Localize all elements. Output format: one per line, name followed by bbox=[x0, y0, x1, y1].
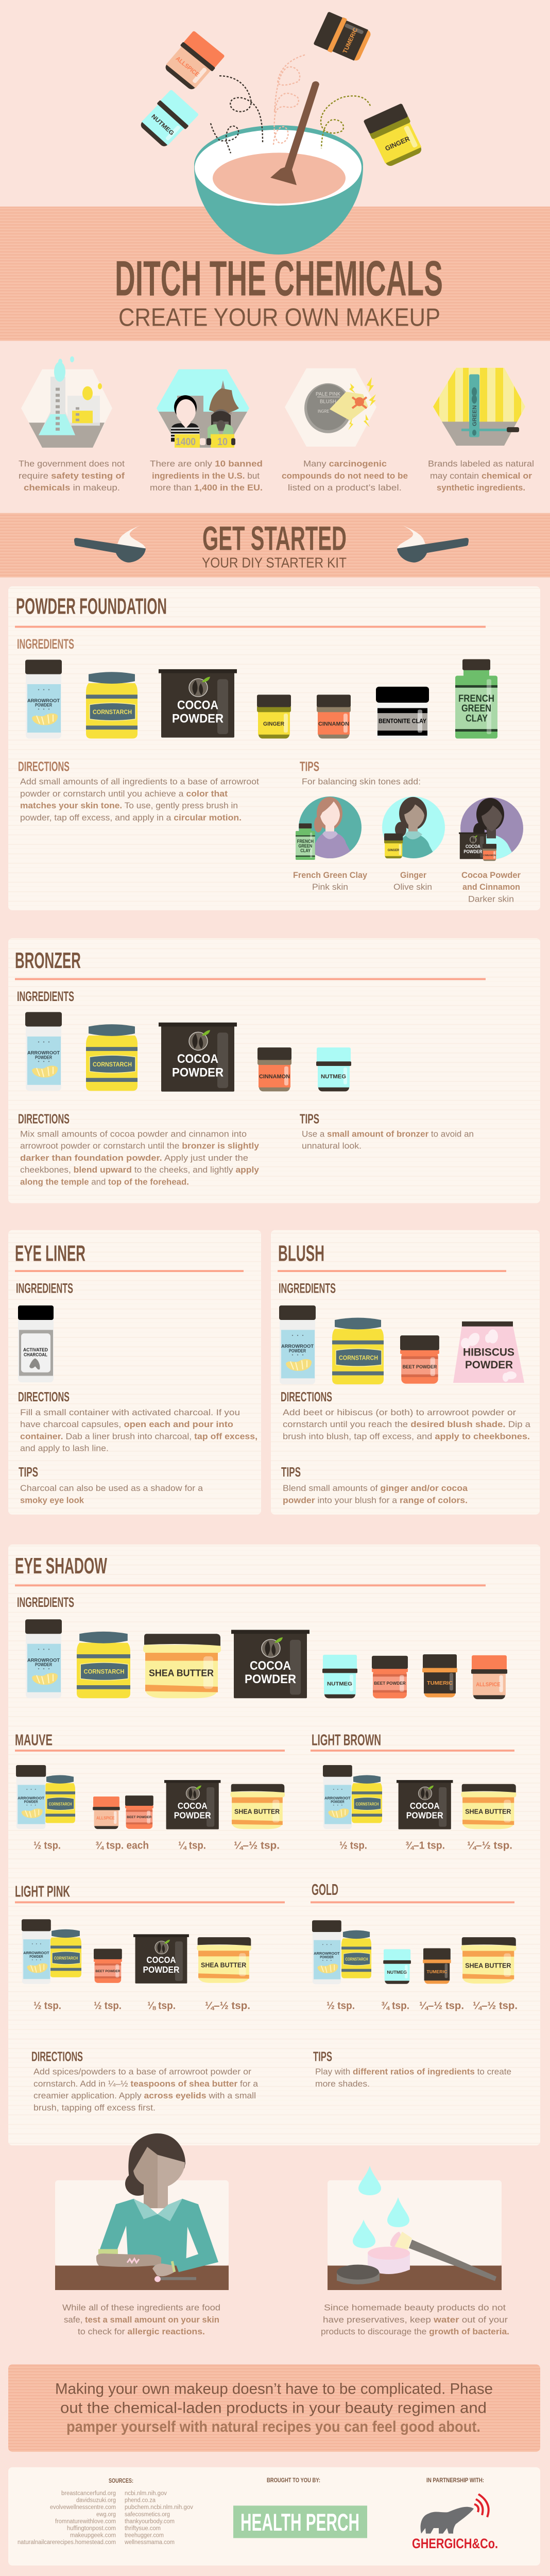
jar: cocoa powder: COCOA bbox=[410, 1801, 440, 1811]
jar: tumeric bbox=[422, 1654, 457, 1697]
jar: arrowroot powder bbox=[16, 1765, 46, 1829]
jar: arrowroot powder: ARROWROOT bbox=[27, 1658, 60, 1663]
measures: light pink bbox=[33, 2000, 250, 2012]
dashed swirl trails bbox=[211, 55, 370, 153]
tips text: more shades. bbox=[315, 2079, 370, 2089]
heading: in partnership with: IN PARTNERSHIP WITH: bbox=[426, 2477, 484, 2484]
text block: keep water out: Since homemade beauty products do not bbox=[324, 2303, 506, 2313]
jar: cocoa powder: COCOA bbox=[177, 1052, 218, 1066]
jar: arrowroot powder bbox=[323, 1765, 352, 1829]
measures: light pink: ½ tsp. bbox=[94, 2000, 122, 2012]
jar: arrowroot powder bbox=[279, 1306, 316, 1384]
jar: cocoa powder bbox=[397, 1780, 453, 1829]
jar: cornstarch: CORNSTARCH bbox=[339, 1354, 378, 1361]
jar: shea butter: SHEA BUTTER bbox=[201, 1961, 247, 1969]
jar: cornstarch bbox=[50, 1929, 81, 1977]
labels: skin tone recommendations: Pink skin bbox=[312, 882, 348, 892]
jar: allspice bbox=[471, 1655, 507, 1699]
jar: cornstarch bbox=[77, 1632, 130, 1698]
jar: arrowroot powder: POWDER bbox=[320, 1955, 334, 1959]
text block: banned ingredients line 2: ingredients in the U.S. but bbox=[152, 471, 260, 481]
labels: skin tone recommendations: Olive skin bbox=[393, 882, 432, 892]
jar: cocoa powder: POWDER bbox=[143, 1964, 180, 1975]
jar: cinnamon bbox=[317, 694, 351, 739]
text block: safety testing line 2: require safety testing of bbox=[19, 471, 125, 481]
callout: closing statement bbox=[8, 2364, 540, 2452]
subheading: ingredients: INGREDIENTS bbox=[16, 1280, 73, 1296]
panel: eye shadow bbox=[8, 1545, 540, 2145]
directions text bbox=[33, 2067, 259, 2112]
labels: skin tone recommendations: and Cinnamon bbox=[462, 882, 520, 892]
measures: light pink: ⅛ tsp. bbox=[147, 2000, 176, 2012]
jar: allspice bbox=[162, 30, 226, 93]
directions text: cornstarch until you reach the desired blush shade. Dip a bbox=[283, 1419, 531, 1429]
jar: cornstarch: CORNSTARCH bbox=[93, 1061, 132, 1068]
jar: arrowroot powder: POWDER bbox=[35, 1662, 52, 1667]
text block: keep water out: have preservatives, keep water out of your bbox=[323, 2315, 508, 2325]
jar: shea butter: SHEA BUTTER bbox=[149, 1668, 214, 1679]
directions text: cornstarch. Add in ¼–½ teaspoons of shea butter for a bbox=[33, 2079, 259, 2089]
subheading: tips: TIPS bbox=[300, 1111, 319, 1126]
directions text bbox=[20, 777, 259, 822]
icon: blush compact under magnifying light bbox=[285, 368, 376, 447]
list: sources: phend.co.za bbox=[125, 2497, 156, 2504]
text block: keep water out bbox=[321, 2303, 509, 2336]
figure: pink skin with french green clay bbox=[296, 796, 362, 861]
recipe: gold bbox=[311, 1880, 518, 2012]
jar: beet powder bbox=[94, 1948, 122, 1983]
list: sources: treehugger.com bbox=[125, 2532, 164, 2538]
labels: skin tone recommendations: Cocoa Powder bbox=[461, 870, 521, 880]
directions text: Add small amounts of all ingredients to a base of arrowroot bbox=[20, 777, 259, 787]
jar: beet powder: BEET POWDER bbox=[127, 1816, 152, 1819]
figure: pink skin with french green clay: GREEN bbox=[299, 843, 312, 849]
tips text: For balancing skin tones add: bbox=[302, 777, 421, 787]
tips text bbox=[283, 1483, 468, 1505]
icon: two women holding banned ingredient counts: 10 bbox=[217, 436, 228, 448]
subheading: tips: TIPS bbox=[313, 2049, 332, 2064]
heading: gold: GOLD bbox=[312, 1880, 338, 1899]
icon: blush compact under magnifying light: PALE PINK bbox=[316, 392, 340, 397]
jar: tumeric: TUMERIC bbox=[427, 1680, 453, 1686]
jar: cocoa powder bbox=[133, 1934, 189, 1984]
subheading: directions: DIRECTIONS bbox=[31, 2049, 83, 2064]
jar: nutmeg: NUTMEG bbox=[321, 1074, 346, 1080]
list: sources bbox=[18, 2489, 193, 2546]
jar: cinnamon bbox=[257, 1047, 291, 1091]
jar: beet powder bbox=[400, 1335, 439, 1384]
list: sources: evolvewellnesscentre.com bbox=[50, 2503, 116, 2511]
tips text bbox=[20, 1483, 203, 1505]
jar: cocoa powder: COCOA bbox=[177, 699, 218, 712]
measures: gold: ¾ tsp. bbox=[381, 2000, 409, 2012]
heading: eye shadow: EYE SHADOW bbox=[15, 1554, 107, 1579]
logo: ghergich and co elephant: GHERGICH&Co. bbox=[412, 2535, 498, 2551]
figure: olive skin with ginger: GINGER bbox=[388, 849, 400, 852]
recipe: mauve bbox=[15, 1731, 285, 1852]
measures: mauve: ½ tsp. bbox=[33, 1840, 61, 1852]
list: sources: fromnaturewithlove.com bbox=[55, 2518, 116, 2524]
icon: right measuring scoop bbox=[397, 526, 469, 563]
list: sources: wellnessmama.com bbox=[124, 2538, 175, 2546]
illustration: woman testing product on her skin bbox=[55, 2133, 229, 2290]
jar: shea butter bbox=[230, 1784, 285, 1829]
directions text: Fill a small container with activated charcoal. If you bbox=[20, 1408, 240, 1417]
directions text: Add beet or hibiscus (or both) to arrowroot powder or bbox=[283, 1408, 516, 1417]
directions text: matches your skin tone. To use, gently press brush in bbox=[20, 801, 238, 810]
directions text: arrowroot powder or cornstarch until the bronzer is slightly bbox=[20, 1141, 260, 1151]
jar: activated charcoal: CHARCOAL bbox=[24, 1352, 47, 1358]
jar: beet powder: BEET POWDER bbox=[403, 1364, 437, 1369]
jar: arrowroot powder: ARROWROOT bbox=[27, 1050, 60, 1056]
jar: cocoa powder bbox=[159, 1023, 237, 1092]
subheading: tips: TIPS bbox=[300, 759, 319, 774]
subheading: directions: DIRECTIONS bbox=[18, 1111, 70, 1126]
jar: cornstarch: CORNSTARCH bbox=[356, 1802, 379, 1807]
subheading: ingredients: INGREDIENTS bbox=[17, 988, 74, 1004]
directions text: brush into blush, tap off excess, and apply to cheekbones. bbox=[283, 1432, 530, 1441]
jar: cornstarch bbox=[45, 1775, 75, 1823]
heading: brought to you by: BROUGHT TO YOU BY: bbox=[267, 2477, 320, 2484]
jar: hibiscus powder: POWDER bbox=[465, 1358, 513, 1371]
jar: arrowroot powder: ARROWROOT bbox=[27, 698, 60, 703]
jar: french green clay: GREEN bbox=[461, 703, 491, 714]
jar: cornstarch bbox=[332, 1318, 384, 1384]
subtitle: CREATE YOUR OWN MAKEUP bbox=[118, 303, 440, 331]
jar: activated charcoal: ACTIVATED bbox=[23, 1347, 48, 1352]
measures: mauve: ¼ tsp. bbox=[178, 1840, 206, 1852]
jar: beet powder bbox=[372, 1656, 408, 1699]
jar: shea butter bbox=[197, 1937, 251, 1983]
jar: activated charcoal bbox=[18, 1306, 54, 1382]
jar: arrowroot powder: POWDER bbox=[35, 703, 52, 708]
icon: mascara labeled green on striped hexagon: GREEN bbox=[472, 405, 478, 426]
measures: light pink: ½ tsp. bbox=[33, 2000, 61, 2012]
measures: mauve bbox=[33, 1840, 280, 1852]
figure: pink skin with french green clay: CLAY bbox=[300, 848, 311, 853]
icon: two women holding banned ingredient counts: 1400 bbox=[176, 436, 196, 448]
directions text: brush, tapping off excess first. bbox=[33, 2103, 156, 2112]
text block: banned ingredients line 3: more than 1,400 in the EU. bbox=[150, 483, 263, 493]
list: sources: safecosmetics.org bbox=[125, 2511, 170, 2518]
text block: natural labels line 2: may contain chemical or bbox=[430, 471, 532, 481]
text block: carcinogens line 2: compounds do not need to be bbox=[282, 471, 408, 481]
text block: natural labels line 3: synthetic ingredients. bbox=[437, 483, 525, 493]
jar: cinnamon: CINNAMON bbox=[318, 721, 349, 727]
icon: left measuring scoop bbox=[74, 526, 146, 563]
jar: cornstarch: CORNSTARCH bbox=[84, 1668, 125, 1675]
heading: mauve: MAUVE bbox=[15, 1731, 53, 1749]
jar: arrowroot powder: ARROWROOT bbox=[23, 1951, 49, 1955]
jar: arrowroot powder: POWDER bbox=[24, 1800, 38, 1804]
figure: pink skin with french green clay: FRENCH bbox=[297, 839, 314, 844]
jar: french green clay: FRENCH bbox=[458, 693, 494, 704]
heading: eye liner: EYE LINER bbox=[15, 1241, 85, 1266]
text block: allergy test: While all of these ingredients are food bbox=[62, 2303, 220, 2313]
subheading: ingredients: INGREDIENTS bbox=[17, 1594, 74, 1610]
jar: arrowroot powder bbox=[25, 660, 62, 739]
subheading: starter kit: YOUR DIY STARTER KIT bbox=[202, 555, 347, 571]
jar: nutmeg bbox=[138, 89, 199, 149]
measures: light brown: ¾–1 tsp. bbox=[405, 1840, 445, 1852]
panel: four facts bbox=[19, 357, 534, 493]
list: sources: makeupgeek.com bbox=[70, 2532, 116, 2538]
directions text: along the temple and top of the forehead. bbox=[20, 1177, 189, 1187]
list: sources: davidsuzuki.org bbox=[76, 2497, 116, 2504]
heading: sources: SOURCES: bbox=[109, 2477, 133, 2484]
logo: health perch: HEALTH PERCH bbox=[240, 2509, 359, 2536]
jar: cocoa powder bbox=[231, 1630, 310, 1698]
tips text: unnatural look. bbox=[302, 1141, 362, 1151]
header illustration: mixing bowl and spice jars bbox=[138, 11, 425, 255]
jar: allspice: ALLSPICE bbox=[476, 1682, 501, 1688]
jar: cocoa powder bbox=[159, 669, 237, 738]
figure: darker skin with cocoa powder and cinnamon: POWDER bbox=[463, 849, 483, 854]
jar: tumeric bbox=[313, 11, 373, 64]
subheading: tips: TIPS bbox=[281, 1465, 301, 1480]
text block: banned ingredients: There are only 10 banned bbox=[150, 459, 263, 469]
jar: arrowroot powder bbox=[22, 1919, 51, 1984]
measures: light brown bbox=[339, 1840, 512, 1852]
jar: ginger bbox=[363, 103, 425, 168]
subheading: directions: DIRECTIONS bbox=[18, 1389, 70, 1404]
heading: light brown: LIGHT BROWN bbox=[312, 1731, 381, 1749]
jar: allspice bbox=[93, 1797, 120, 1829]
list: sources: ncbi.nlm.nih.gov bbox=[125, 2489, 167, 2497]
jar: ginger bbox=[257, 694, 291, 739]
icon: teal bowl bbox=[194, 125, 363, 255]
labels: skin tone recommendations bbox=[293, 870, 521, 904]
heading: light pink: LIGHT PINK bbox=[15, 1882, 70, 1901]
callout: closing statement: Making your own makeup doesn’t have to be complicated. Phase bbox=[55, 2380, 493, 2397]
jar: cornstarch bbox=[86, 1024, 138, 1091]
jar: nutmeg: NUTMEG bbox=[387, 1970, 407, 1975]
jar: cornstarch bbox=[86, 672, 138, 739]
directions text bbox=[20, 1408, 257, 1453]
recipe: light brown bbox=[311, 1731, 516, 1852]
jar: cocoa powder: POWDER bbox=[172, 712, 224, 725]
icon: spoon bbox=[270, 81, 319, 185]
directions text: and apply to lash line. bbox=[20, 1444, 109, 1453]
callout: closing statement: pamper yourself with natural recipes you can feel good about. bbox=[66, 2418, 480, 2435]
jar: tumeric: TUMERIC bbox=[341, 27, 359, 55]
text block: safety testing line 3: chemicals in makeup. bbox=[24, 483, 120, 493]
jar: tumeric bbox=[423, 1948, 451, 1984]
measures: gold: ¼–½ tsp. bbox=[419, 2000, 464, 2012]
labels: skin tone recommendations: French Green Clay bbox=[293, 870, 368, 880]
jar: cocoa powder: COCOA bbox=[178, 1801, 208, 1811]
tips text: Use a small amount of bronzer to avoid an bbox=[302, 1129, 474, 1139]
measures: light brown: ¼–½ tsp. bbox=[467, 1840, 512, 1852]
measures: gold bbox=[326, 2000, 518, 2012]
jar: cocoa powder bbox=[164, 1780, 220, 1829]
jar: allspice: ALLSPICE bbox=[96, 1816, 115, 1820]
jar: cocoa powder: COCOA bbox=[250, 1659, 291, 1673]
list: sources: naturalnailcarerecipes.homestead.com bbox=[18, 2538, 116, 2546]
jar: ginger: GINGER bbox=[263, 721, 284, 727]
illustration: water drops falling on an open jar and brush bbox=[328, 2166, 502, 2290]
jar: cocoa powder: POWDER bbox=[174, 1810, 211, 1821]
directions text: Mix small amounts of cocoa powder and cinnamon into bbox=[20, 1129, 247, 1139]
jar: shea butter bbox=[461, 1937, 516, 1984]
measures: light pink: ¼–½ tsp. bbox=[205, 2000, 250, 2012]
jar: ginger: GINGER bbox=[384, 135, 411, 152]
figure: darker skin with cocoa powder and cinnamon: COCOA bbox=[466, 844, 480, 849]
list: sources: ewg.org bbox=[96, 2511, 116, 2518]
jar: cornstarch: CORNSTARCH bbox=[93, 708, 132, 716]
heading: powder foundation: POWDER FOUNDATION bbox=[16, 594, 167, 619]
jar: allspice: ALLSPICE bbox=[175, 55, 201, 78]
panel: footer bbox=[8, 2467, 540, 2566]
jar: arrowroot powder: ARROWROOT bbox=[314, 1951, 340, 1956]
logo: health perch bbox=[233, 2505, 367, 2538]
recipe: light pink bbox=[15, 1882, 285, 2012]
text block: allergy test: to check for allergic reactions. bbox=[78, 2327, 205, 2336]
jar: bentonite clay: BENTONITE CLAY bbox=[379, 718, 426, 724]
jar: nutmeg: NUTMEG bbox=[150, 113, 176, 137]
directions text: cheekbones, blend upward to the cheeks, and lightly apply bbox=[20, 1165, 260, 1175]
subheading: tips: TIPS bbox=[19, 1465, 38, 1480]
list: sources: breastcancerfund.org bbox=[61, 2489, 116, 2497]
tips text: Charcoal can also be used as a shadow for a bbox=[20, 1483, 203, 1493]
text block: keep water out: products to discourage the growth of bacteria. bbox=[321, 2327, 509, 2336]
list: sources: thriftysue.com bbox=[125, 2524, 161, 2532]
jar: bentonite clay bbox=[376, 687, 429, 739]
list: sources: thankyourbody.com bbox=[125, 2518, 175, 2524]
jar: shea butter: SHEA BUTTER bbox=[465, 1808, 511, 1815]
tips text: Play with different ratios of ingredients to create bbox=[315, 2067, 511, 2076]
subheading: directions: DIRECTIONS bbox=[18, 759, 70, 774]
jar: shea butter bbox=[143, 1634, 221, 1698]
jar: arrowroot powder bbox=[25, 1619, 62, 1698]
text block: allergy test: safe, test a small amount on your skin bbox=[64, 2315, 219, 2325]
tips text: smoky eye look bbox=[20, 1496, 84, 1505]
measures: light brown: ½ tsp. bbox=[339, 1840, 367, 1852]
directions text: creamier application. Apply across eyelids with a small bbox=[33, 2091, 256, 2100]
directions text bbox=[283, 1408, 531, 1441]
jar: beet powder: BEET POWDER bbox=[374, 1681, 406, 1686]
text block: allergy test bbox=[62, 2303, 220, 2336]
subheading: ingredients: INGREDIENTS bbox=[17, 636, 74, 652]
jar: nutmeg bbox=[316, 1047, 351, 1091]
heading: bronzer: BRONZER bbox=[15, 948, 81, 973]
figure: darker skin with cocoa powder and cinnamon: CINNAMON bbox=[483, 854, 496, 856]
directions text bbox=[20, 1129, 260, 1187]
subheading: ingredients: INGREDIENTS bbox=[279, 1280, 336, 1296]
logo: ghergich and co elephant bbox=[412, 2494, 498, 2551]
jar: cornstarch: CORNSTARCH bbox=[54, 1956, 78, 1961]
figure: darker skin with cocoa powder and cinnamon bbox=[459, 798, 523, 862]
panel: bronzer bbox=[8, 938, 540, 1203]
jar: arrowroot powder bbox=[312, 1920, 341, 1984]
icon: blush compact under magnifying light: BLUSH bbox=[320, 399, 336, 405]
measures: gold: ¼–½ tsp. bbox=[473, 2000, 518, 2012]
jar: cornstarch: CORNSTARCH bbox=[49, 1802, 72, 1807]
jar: cocoa powder: POWDER bbox=[172, 1066, 224, 1079]
jar: nutmeg bbox=[383, 1949, 411, 1984]
heading: get started: GET STARTED bbox=[202, 519, 347, 557]
icon: laboratory glassware hexagon bbox=[21, 357, 112, 448]
tips text bbox=[315, 2067, 511, 2089]
jar: cornstarch: CORNSTARCH bbox=[346, 1957, 368, 1962]
labels: skin tone recommendations: Ginger bbox=[400, 870, 426, 880]
panel: blush bbox=[271, 1230, 540, 1515]
jar: arrowroot powder: ARROWROOT bbox=[18, 1796, 44, 1801]
directions text: powder, tap off excess, and apply in a circular motion. bbox=[20, 813, 242, 822]
jar: tumeric: TUMERIC bbox=[426, 1969, 448, 1974]
jar: nutmeg bbox=[322, 1655, 357, 1698]
text block: safety testing: The government does not bbox=[19, 459, 125, 469]
jar: beet powder: BEET POWDER bbox=[95, 1970, 121, 1973]
directions text: container. Dab a liner brush into charcoal, tap off excess, bbox=[20, 1432, 257, 1441]
directions text: Add spices/powders to a base of arrowroot powder or bbox=[33, 2067, 251, 2076]
measures: mauve: ¼–½ tsp. bbox=[234, 1840, 280, 1852]
jar: hibiscus powder bbox=[453, 1321, 524, 1383]
jar: cocoa powder: COCOA bbox=[147, 1955, 176, 1965]
jar: arrowroot powder: POWDER bbox=[35, 1055, 52, 1060]
jar: arrowroot powder: ARROWROOT bbox=[281, 1344, 314, 1349]
measures: gold: ½ tsp. bbox=[326, 2000, 355, 2012]
jar: nutmeg: NUTMEG bbox=[327, 1681, 352, 1687]
directions text: powder or cornstarch until you achieve a color that bbox=[20, 789, 228, 799]
directions text: darker than foundation powder. Apply just under the bbox=[20, 1153, 248, 1163]
figure: olive skin with ginger bbox=[382, 796, 445, 861]
jar: french green clay: CLAY bbox=[466, 713, 488, 724]
jar: shea butter: SHEA BUTTER bbox=[465, 1962, 511, 1969]
jar: arrowroot powder: POWDER bbox=[29, 1954, 43, 1959]
jar: arrowroot powder: POWDER bbox=[289, 1348, 306, 1353]
directions text: have charcoal capsules, open each and pour into bbox=[20, 1419, 233, 1429]
icon: blush compact under magnifying light: INGRE bbox=[318, 409, 329, 414]
list: sources: huffingtonpost.com bbox=[67, 2524, 116, 2532]
icon: two women holding banned ingredient counts bbox=[157, 369, 249, 448]
tips text bbox=[302, 1129, 474, 1151]
icon: mascara labeled green on striped hexagon bbox=[433, 367, 525, 446]
text block: carcinogens: Many carcinogenic bbox=[303, 459, 387, 469]
band: get started bbox=[0, 513, 550, 578]
tips text: Blend small amounts of ginger and/or cocoa bbox=[283, 1483, 468, 1493]
jar: arrowroot powder: ARROWROOT bbox=[324, 1796, 351, 1801]
jar: shea butter bbox=[461, 1784, 516, 1829]
jar: cornstarch bbox=[352, 1775, 382, 1823]
jar: cocoa powder: POWDER bbox=[406, 1810, 443, 1821]
jar: shea butter: SHEA BUTTER bbox=[234, 1808, 280, 1815]
panel: powder foundation bbox=[8, 586, 540, 910]
panel: eye liner bbox=[8, 1230, 261, 1515]
list: sources: pubchem.ncbi.nlm.nih.gov bbox=[125, 2503, 193, 2511]
jar: french green clay bbox=[455, 659, 497, 739]
jar: hibiscus powder: HIBISCUS bbox=[463, 1346, 514, 1359]
callout: closing statement: out the chemical-laden products in your beauty regimen and bbox=[60, 2399, 487, 2416]
labels: skin tone recommendations: Darker skin bbox=[468, 894, 514, 904]
tips text: powder into your blush for a range of colors. bbox=[283, 1496, 468, 1505]
jar: arrowroot powder bbox=[25, 1012, 62, 1091]
jar: beet powder bbox=[125, 1795, 153, 1829]
text block: carcinogens line 3: listed on a product’s label. bbox=[288, 483, 402, 493]
subheading: directions: DIRECTIONS bbox=[281, 1389, 332, 1404]
header band bbox=[0, 207, 550, 341]
heading: blush: BLUSH bbox=[278, 1241, 324, 1266]
measures: mauve: ¾ tsp. each bbox=[95, 1840, 149, 1852]
text block: natural labels: Brands labeled as natural bbox=[428, 459, 534, 469]
jar: cornstarch bbox=[341, 1930, 371, 1978]
jar: arrowroot powder: POWDER bbox=[331, 1800, 345, 1804]
jar: cocoa powder: POWDER bbox=[245, 1672, 296, 1686]
jar: cinnamon: CINNAMON bbox=[259, 1074, 290, 1080]
